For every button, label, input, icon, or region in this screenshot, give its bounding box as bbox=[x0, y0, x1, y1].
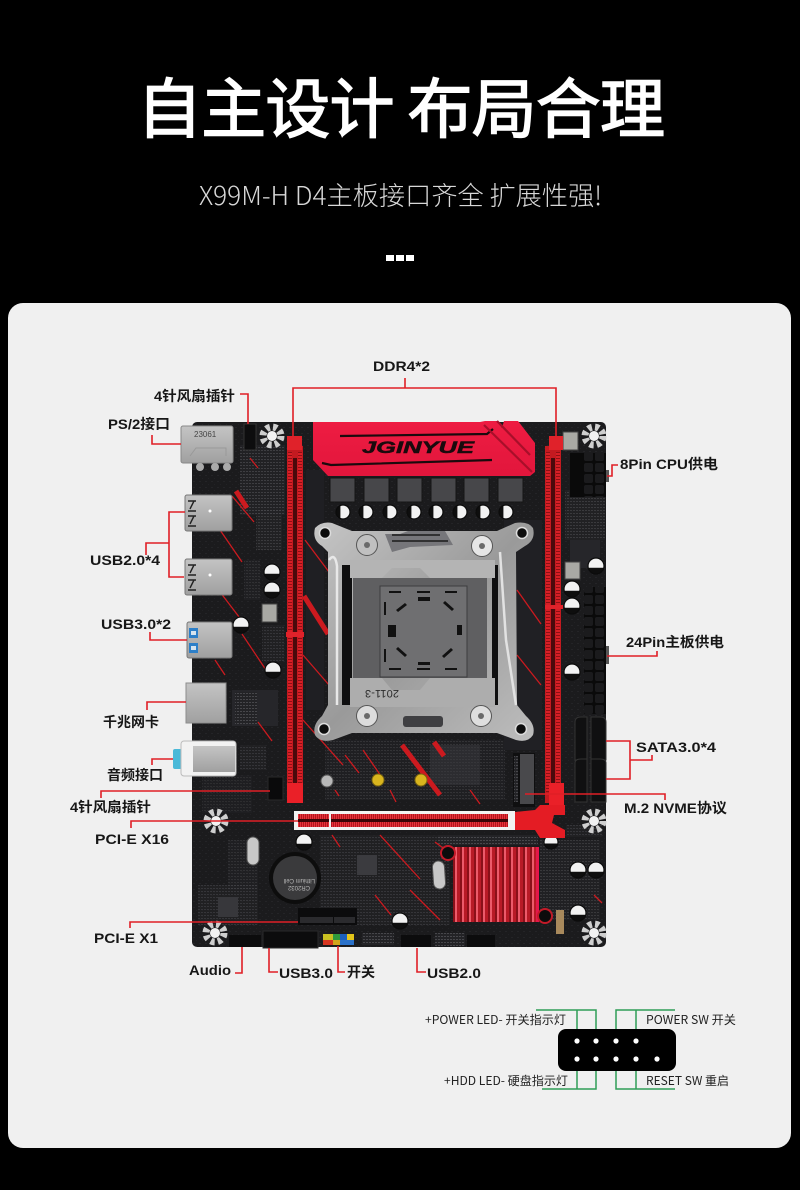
fan header lower bbox=[268, 777, 283, 800]
label: HDD LED: +HDD LED- 硬盘指示灯 bbox=[444, 1072, 568, 1089]
capacitors bbox=[233, 505, 604, 929]
PCI-E X1 slot bbox=[298, 908, 357, 925]
VRM heatsink: JGINYUE bbox=[362, 438, 475, 457]
bottom headers bbox=[229, 931, 495, 948]
label: power LED: +POWER LED- 开关指示灯 bbox=[425, 1011, 566, 1028]
USB 3.0 port bbox=[187, 622, 232, 658]
label: PCI-E X16: PCI-E X16 bbox=[95, 831, 169, 847]
panel: motherboard diagram bbox=[8, 303, 791, 1148]
label: PCI-E X1: PCI-E X1 bbox=[94, 930, 158, 946]
mounting fans bbox=[206, 427, 603, 942]
label: switch: 开关 bbox=[347, 964, 375, 980]
CPU socket bbox=[314, 523, 534, 741]
coin cell battery bbox=[269, 852, 321, 904]
PCI-E X16 slot bbox=[294, 805, 565, 838]
coin cell battery: Lithium Cell bbox=[284, 877, 315, 883]
LAN port bbox=[186, 683, 226, 723]
VRM inductors bbox=[330, 478, 523, 502]
label: Audio: Audio bbox=[189, 962, 231, 978]
label: 4-pin fan header top: 4针风扇插针 bbox=[154, 388, 235, 404]
label: audio jack: 音频接口 bbox=[107, 767, 163, 783]
callout lines bbox=[101, 378, 665, 973]
fan header top bbox=[244, 424, 256, 450]
label: PS/2: PS/2接口 bbox=[108, 416, 170, 432]
subtitle: X99M-H D4主板接口齐全 扩展性强! bbox=[199, 176, 602, 213]
title: 自主设计 布局合理 bbox=[137, 57, 665, 151]
red PCB accent traces bbox=[215, 458, 602, 920]
SATA ports bbox=[575, 717, 606, 802]
DDR4 slot left bbox=[286, 436, 304, 803]
label: 8-pin CPU power: 8Pin CPU供电 bbox=[620, 456, 718, 472]
label: M.2 NVMe: M.2 NVME协议 bbox=[624, 800, 727, 816]
standoffs bbox=[321, 774, 427, 787]
DDR4 slot right bbox=[545, 436, 564, 805]
small inductors bbox=[262, 432, 580, 622]
label: 24-pin power: 24Pin主板供电 bbox=[626, 634, 724, 650]
label: USB3.0*2: USB3.0*2 bbox=[101, 616, 171, 632]
front panel header diagram bbox=[425, 1010, 736, 1089]
24-pin power connector bbox=[584, 587, 609, 714]
CPU socket: 2011-3 bbox=[365, 687, 399, 699]
label: power switch: POWER SW 开关 bbox=[646, 1011, 736, 1028]
motherboard bbox=[173, 421, 609, 948]
PS/2 port bbox=[181, 426, 233, 471]
label: gigabit LAN: 千兆网卡 bbox=[103, 714, 159, 730]
label: 4-pin fan header lower: 4针风扇插针 bbox=[70, 799, 151, 815]
board silkscreen and component clusters bbox=[198, 445, 605, 925]
label: DDR4*2: DDR4*2 bbox=[373, 358, 430, 374]
USB 2.0 port upper bbox=[185, 495, 232, 531]
M.2 slot bbox=[513, 753, 535, 807]
crystals bbox=[247, 837, 446, 889]
audio port bbox=[173, 741, 236, 776]
USB 2.0 port lower bbox=[185, 559, 232, 595]
label: USB3.0: USB3.0 bbox=[279, 965, 333, 981]
coin cell battery: CR2032 bbox=[287, 884, 310, 890]
8-pin power connector bbox=[570, 453, 609, 497]
green connector lines bbox=[536, 1010, 675, 1089]
label: SATA: SATA3.0*4 bbox=[636, 739, 716, 755]
label: USB2.0*4: USB2.0*4 bbox=[90, 552, 160, 568]
VRM heatsink bbox=[313, 421, 535, 476]
label: USB2.0: USB2.0 bbox=[427, 965, 481, 981]
label: reset switch: RESET SW 重启 bbox=[646, 1072, 729, 1089]
header block bbox=[558, 1029, 676, 1071]
decorative title dots bbox=[386, 255, 414, 261]
PS/2 port: 23061 bbox=[194, 430, 217, 439]
chipset heatsink bbox=[441, 846, 564, 934]
